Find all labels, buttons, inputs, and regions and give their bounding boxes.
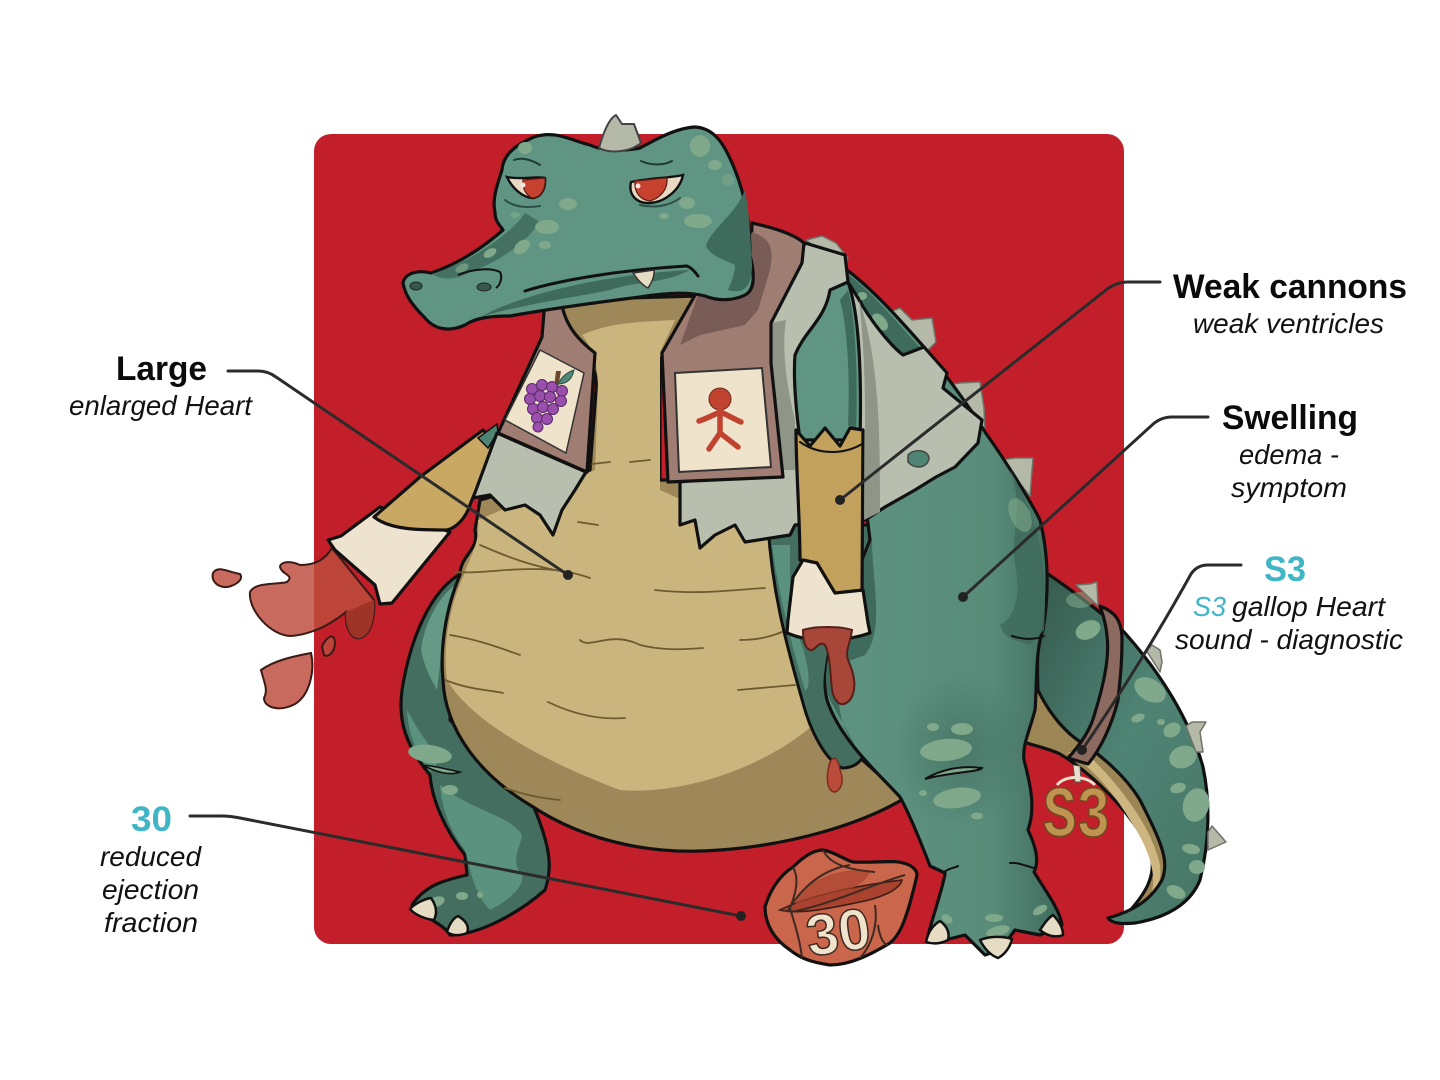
label: S3: S3 <box>1193 591 1227 622</box>
leader line: Large <box>228 371 573 580</box>
label: Swelling: symptom <box>1231 472 1347 503</box>
ball number: 30 <box>802 896 875 969</box>
left eye <box>505 159 545 207</box>
crocodile illustration <box>213 115 1226 969</box>
arm blood drip <box>803 627 854 704</box>
label: S3 <box>1175 550 1403 655</box>
label: 30: 30 <box>131 800 172 839</box>
icon: grapes <box>524 370 574 432</box>
near foot claws <box>926 915 1063 958</box>
S3 tag: S3 <box>1043 776 1110 858</box>
label: Swelling: edema - <box>1239 439 1339 470</box>
mouth line <box>525 266 698 291</box>
label: 30 <box>100 800 203 938</box>
white cuff <box>787 560 870 640</box>
leader line: Swelling <box>958 417 1208 602</box>
nostrils <box>410 269 501 291</box>
label: Weak cannons <box>1173 268 1407 339</box>
belt strap and S3 pendant <box>1043 606 1122 858</box>
label: S3: S3 <box>1264 550 1306 589</box>
right eye <box>630 161 683 207</box>
patch: grapes <box>505 350 584 453</box>
label: Large: Large <box>116 350 207 388</box>
label: S3: gallop Heart <box>1232 591 1386 622</box>
label: Weak cannons: weak ventricles <box>1193 308 1384 339</box>
head spots <box>454 135 734 275</box>
label: Large <box>69 350 253 421</box>
shoulder green <box>478 424 498 448</box>
leader line: Weak cannons <box>835 282 1160 505</box>
label: Swelling: Swelling <box>1222 399 1358 437</box>
leader line: S3 <box>1077 565 1241 755</box>
torn shirt right <box>680 243 982 548</box>
head <box>403 115 753 329</box>
far foot claws <box>410 898 468 935</box>
right arm <box>787 282 870 704</box>
leader line: 30 <box>190 816 746 921</box>
label: Weak cannons: Weak cannons <box>1173 268 1407 306</box>
fang <box>633 270 654 288</box>
head spike <box>599 115 641 151</box>
left arm <box>213 424 498 708</box>
back spikes <box>806 236 1033 496</box>
crocodile tail <box>1024 572 1226 923</box>
patch: stick figure <box>675 368 771 472</box>
tail spikes <box>1076 582 1226 850</box>
label: 30: reduced <box>100 841 203 872</box>
blood droplets <box>213 569 335 708</box>
hip blood drip <box>827 758 842 792</box>
label: 30: ejection <box>102 874 199 905</box>
gold sleeve <box>374 430 493 530</box>
label: 30: fraction <box>104 907 198 938</box>
head shading <box>706 190 752 291</box>
left shirt scrap <box>473 433 586 535</box>
vest right panel <box>662 223 804 482</box>
red background panel <box>314 134 1124 944</box>
gold sleeve <box>796 428 863 595</box>
belly wrinkles <box>445 460 795 800</box>
belly <box>442 296 905 851</box>
label: Large: enlarged Heart <box>69 390 253 421</box>
label: Swelling <box>1222 399 1358 503</box>
white sleeve <box>328 507 450 604</box>
near leg and body <box>768 262 1063 958</box>
hand of blood <box>250 548 374 638</box>
icon: stick figure <box>699 388 741 449</box>
vest left panel <box>498 300 595 472</box>
label: S3: sound - diagnostic <box>1175 624 1403 655</box>
far leg <box>401 573 549 935</box>
crushed basketball with number 30 <box>765 850 917 969</box>
